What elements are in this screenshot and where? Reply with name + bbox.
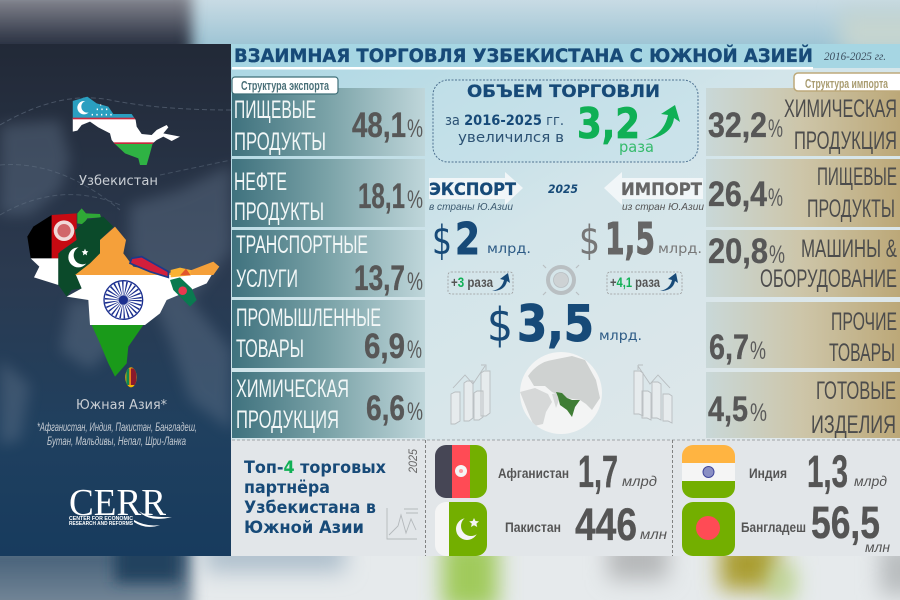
flag: India [682, 445, 735, 498]
export: chemical products 6,6%: ХИМИЧЕСКАЯ [236, 375, 349, 403]
partner: Pakistan 446 million [505, 499, 667, 550]
export: transport services 13,7%: 13,7 [354, 259, 405, 298]
panel: import structure [706, 73, 900, 439]
icon: small line chart [387, 508, 418, 539]
partner: India 1,3 billion [749, 446, 887, 497]
badge: export +3 times: +3 раза [451, 274, 493, 290]
title: ВЗАИМНАЯ ТОРГОВЛЯ УЗБЕКИСТАНА С ЮЖНОЙ АЗИЕЙ [234, 45, 813, 67]
export label [232, 77, 338, 94]
total value $3,5 billion: млрд. [599, 329, 642, 344]
callout: trade volume: ОБЪЕМ ТОРГОВЛИ [467, 82, 660, 102]
import: other goods 6,7%: % [750, 337, 766, 365]
footnote: South Asia countries: Бутан, Мальдивы, Непал, Шри-Ланка [47, 434, 186, 448]
export: oil products 18,1%: НЕФТЕ [234, 168, 287, 196]
blurred bottom background band [0, 556, 900, 600]
import: food products 26,4% [708, 163, 897, 223]
export: transport services 13,7%: УСЛУГИ [236, 265, 298, 293]
export: industrial goods 6,9%: ТОВАРЫ [236, 335, 304, 363]
import arrow heading: ИМПОРТ [621, 180, 703, 199]
flag: Pakistan [435, 502, 487, 556]
import: chemical products 32,2%: % [768, 115, 783, 143]
heading: top 4 partners: Южной Азии [244, 518, 364, 537]
import: food products 26,4%: 26,4 [708, 175, 767, 214]
export: industrial goods 6,9% [236, 304, 422, 366]
heading: top 4 partners: Узбекистана в [244, 498, 376, 517]
title years: 2016-2025 гг. [824, 49, 886, 63]
import: other goods 6,7% [709, 308, 897, 367]
flag: Bangladesh [682, 502, 735, 556]
partner: Afghanistan 1,7 billion: млрд [622, 473, 657, 489]
panel: export structure [232, 77, 425, 438]
logo: CERR: CERR [69, 482, 167, 524]
export: food products 48,1%: 48,1 [352, 106, 406, 145]
import value $1,5 billion [579, 214, 702, 265]
partner: Bangladesh 56,5 million: млн [865, 539, 890, 555]
year 2025: 2025 [548, 182, 578, 196]
label: South Asia: Южная Азия* [76, 398, 167, 413]
export label: Структура экспорта [241, 78, 330, 93]
export: chemical products 6,6%: % [407, 398, 423, 426]
import: machinery and equipment 20,8%: 20,8 [708, 232, 768, 271]
export: chemical products 6,6%: 6,6 [366, 389, 405, 428]
map: Uzbekistan flag shape [72, 96, 180, 165]
callout: trade volume: увеличился в [458, 130, 564, 146]
export value $2 billion: $ [432, 218, 452, 264]
logo: CERR: RESEARCH AND REFORMS [69, 521, 133, 527]
import: machinery and equipment 20,8% [708, 232, 897, 293]
callout: trade volume [433, 80, 698, 162]
partner: Pakistan 446 million: 446 [575, 499, 637, 550]
panel: center background [231, 44, 900, 440]
partner: Pakistan 446 million: Пакистан [505, 519, 561, 535]
partner: Afghanistan 1,7 billion: Афганистан [498, 465, 569, 481]
export: oil products 18,1%: 18,1 [358, 177, 405, 216]
import: finished goods 4,5% [708, 377, 896, 439]
total value $3,5 billion: 3,5 [517, 295, 594, 353]
heading: top 4 partners: Топ-4 торговых [244, 458, 386, 477]
logo: CERR: CENTER FOR ECONOMIC [69, 516, 133, 522]
export: food products 48,1% [234, 96, 423, 156]
export: industrial goods 6,9%: % [407, 336, 422, 364]
import: finished goods 4,5%: 4,5 [708, 390, 748, 429]
import: food products 26,4%: % [768, 184, 783, 212]
flag: Afghanistan [435, 445, 487, 498]
partner: India 1,3 billion: 1,3 [807, 446, 848, 497]
partner: Bangladesh 56,5 million: Бангладеш [741, 519, 806, 535]
partner: India 1,3 billion: млрд [854, 473, 887, 489]
import: chemical products 32,2%: 32,2 [708, 106, 767, 145]
callout: trade volume: раза [619, 138, 654, 156]
export: transport services 13,7%: ТРАНСПОРТНЫЕ [236, 231, 368, 259]
export value $2 billion [432, 214, 531, 265]
export: oil products 18,1%: % [407, 186, 423, 214]
export: oil products 18,1%: ПРОДУКТЫ [234, 198, 324, 226]
export row backgrounds [232, 88, 425, 438]
import arrow heading: из стран Ю.Азии [622, 202, 704, 213]
import arrow heading [604, 172, 704, 213]
partner: Bangladesh 56,5 million: 56,5 [811, 497, 880, 548]
blurred top background band [0, 0, 900, 44]
partner: India 1,3 billion: Индия [749, 465, 787, 481]
export: food products 48,1%: ПИЩЕВЫЕ [234, 96, 316, 124]
import: finished goods 4,5%: % [750, 399, 767, 427]
export: industrial goods 6,9%: 6,9 [364, 327, 405, 366]
export: transport services 13,7% [236, 231, 423, 298]
total value $3,5 billion: $ [487, 298, 513, 352]
icon: globe with South Asia highlighted [520, 352, 602, 434]
export value $2 billion: млрд. [487, 242, 531, 257]
import value $1,5 billion: 1,5 [605, 214, 655, 265]
icon: green growth arrow [645, 105, 680, 140]
icon: rising bar chart [451, 365, 490, 424]
footnote: South Asia countries: *Афганистан, Индия, Пакистан, Бангладеш, [37, 420, 197, 434]
panel: top-4 trade partners [231, 440, 900, 556]
panel: left map sidebar [0, 44, 231, 556]
import: other goods 6,7%: 6,7 [709, 328, 749, 367]
partner: Afghanistan 1,7 billion: 1,7 [578, 446, 618, 497]
import: machinery and equipment 20,8%: % [769, 241, 785, 269]
export: transport services 13,7%: % [407, 268, 423, 296]
heading: top 4 partners: партнёра [244, 478, 330, 497]
partner: Pakistan 446 million: млн [640, 526, 667, 542]
export: industrial goods 6,9%: ПРОМЫШЛЕННЫЕ [236, 304, 381, 332]
badge: export +3 times [448, 272, 513, 294]
export: chemical products 6,6% [236, 375, 423, 434]
import value $1,5 billion: млрд. [658, 242, 702, 257]
callout: trade volume: за 2016-2025 гг. [445, 113, 564, 129]
badge: import +4,1 times: +4,1 раза [610, 274, 660, 290]
export value $2 billion: 2 [455, 214, 480, 265]
map: South Asia flag shapes [27, 208, 219, 388]
icon: exchange circle [543, 265, 579, 295]
export: chemical products 6,6%: ПРОДУКЦИЯ [236, 406, 339, 434]
badge: import +4,1 times [607, 272, 682, 294]
year 2025 vertical: 2025 [406, 449, 420, 474]
import row backgrounds [706, 88, 900, 438]
import value $1,5 billion: $ [579, 218, 600, 264]
export: food products 48,1%: % [407, 115, 423, 143]
partner: Bangladesh 56,5 million [741, 497, 890, 555]
icon: falling bar chart [634, 365, 672, 423]
import: chemical products 32,2% [708, 95, 897, 155]
export: oil products 18,1% [234, 168, 423, 226]
export arrow heading: ЭКСПОРТ [429, 180, 517, 199]
total value $3,5 billion [487, 295, 642, 353]
label: Uzbekistan: Узбекистан [79, 174, 158, 189]
export: food products 48,1%: ПРОДУКТЫ [234, 128, 326, 156]
callout: trade volume: 3,2 [577, 99, 640, 148]
footnote: South Asia countries [37, 420, 197, 448]
export arrow heading: в страны Ю.Азии [429, 202, 513, 213]
export arrow heading [429, 172, 523, 213]
partner: Afghanistan 1,7 billion [498, 446, 657, 497]
heading: top 4 partners [244, 458, 386, 537]
